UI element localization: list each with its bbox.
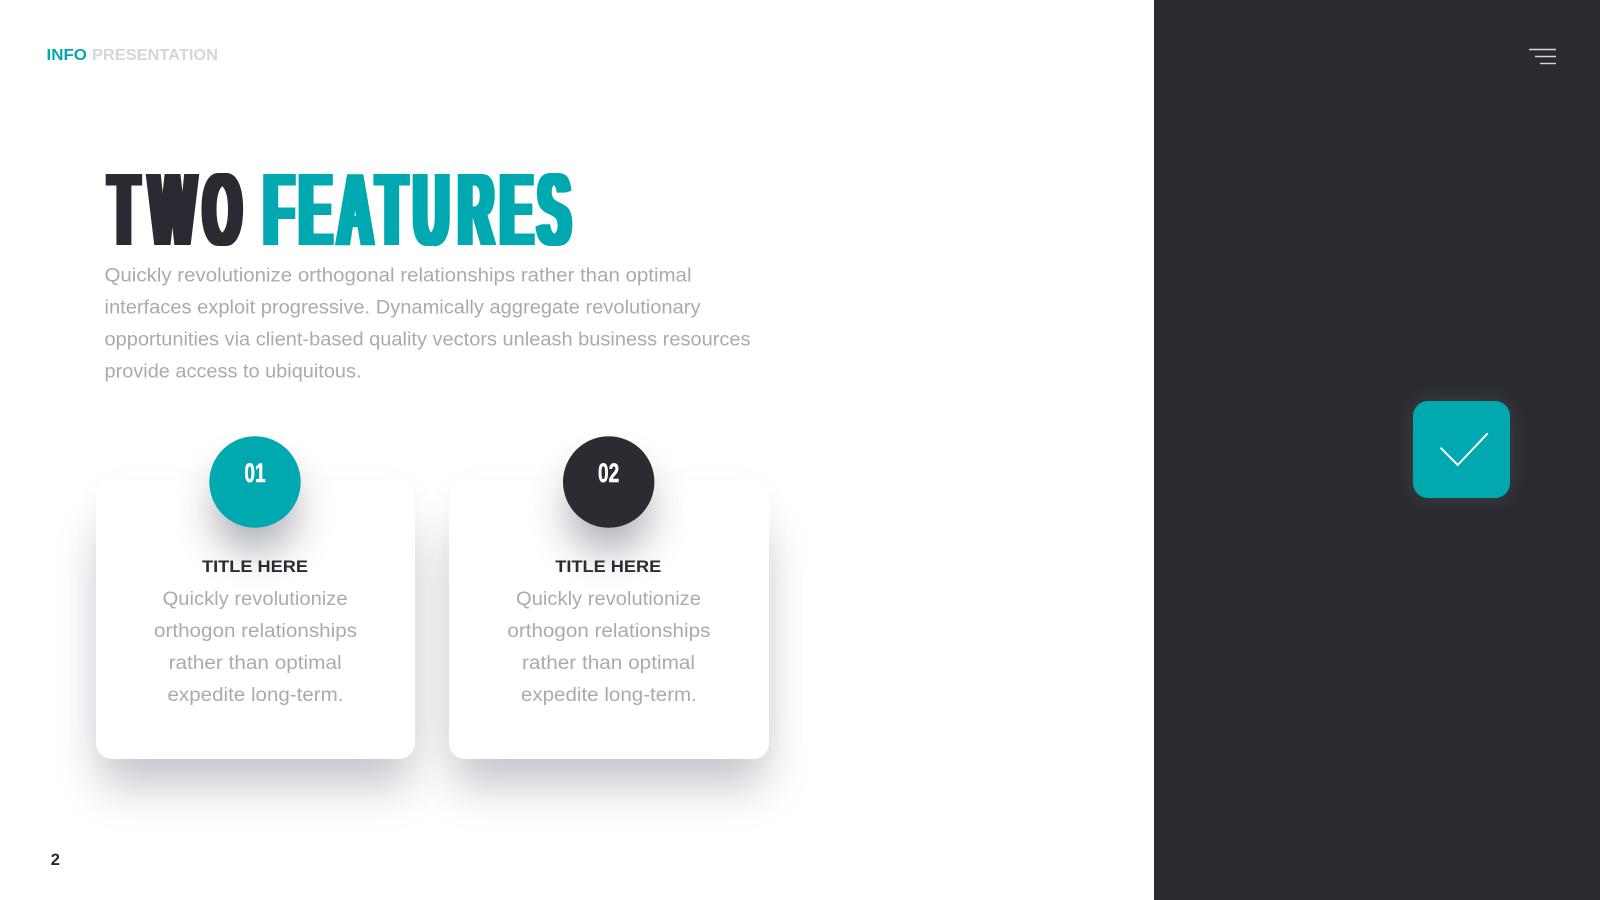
title: FEATURES bbox=[264, 153, 570, 268]
panel: feature card 01 bbox=[96, 436, 415, 786]
badge 02 bbox=[563, 436, 654, 552]
badge 01 bbox=[209, 436, 301, 552]
card text 01: rather than optimal bbox=[169, 653, 342, 674]
intro paragraph bbox=[104, 266, 750, 382]
card text 02 bbox=[507, 589, 710, 706]
badge 02: 02 bbox=[598, 458, 619, 488]
card body 02 bbox=[449, 480, 769, 759]
card body 01 bbox=[96, 480, 415, 759]
card text 01: expedite long-term. bbox=[168, 685, 344, 706]
icon: check mark tile bbox=[1413, 401, 1510, 498]
panel: dark sidebar bbox=[1154, 0, 1600, 900]
card text 01: Quickly revolutionize bbox=[163, 589, 348, 610]
title bbox=[109, 153, 570, 268]
title: TWO bbox=[109, 153, 241, 268]
intro paragraph: interfaces exploit progressive. Dynamically aggregate revolutionary bbox=[104, 298, 701, 318]
intro paragraph: Quickly revolutionize orthogonal relationships rather than optimal bbox=[104, 266, 692, 286]
card text 01 bbox=[154, 589, 357, 706]
header label: PRESENTATION bbox=[92, 47, 218, 64]
card heading 01: TITLE HERE bbox=[202, 557, 308, 576]
icon: menu lines bbox=[1529, 50, 1556, 64]
card text 02: expedite long-term. bbox=[521, 685, 697, 706]
badge 01: 01 bbox=[244, 458, 266, 488]
card text 01: orthogon relationships bbox=[154, 621, 357, 642]
card heading 02: TITLE HERE bbox=[555, 557, 661, 576]
page number: 2 bbox=[51, 851, 60, 869]
intro paragraph: provide access to ubiquitous. bbox=[104, 362, 362, 382]
card text 02: orthogon relationships bbox=[507, 621, 710, 642]
header label: INFO bbox=[46, 47, 87, 64]
intro paragraph: opportunities via client-based quality vectors unleash business resources bbox=[104, 330, 750, 350]
card text 02: Quickly revolutionize bbox=[516, 589, 701, 610]
card text 02: rather than optimal bbox=[522, 653, 695, 674]
panel: feature card 02 bbox=[449, 436, 769, 786]
